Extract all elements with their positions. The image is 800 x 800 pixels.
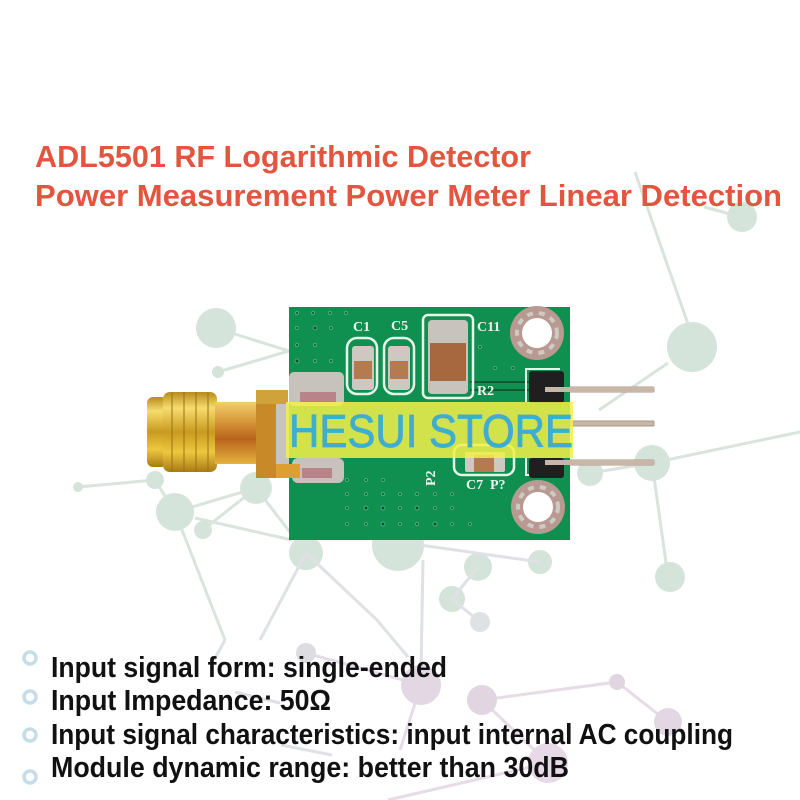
traces	[470, 382, 530, 390]
feature text: Input signal form: single-ended	[51, 652, 447, 684]
header pins	[540, 387, 654, 465]
product photo: RF detector module	[147, 306, 654, 540]
silkscreen and capacitors	[347, 315, 514, 475]
circuit board	[289, 307, 570, 540]
feature text	[51, 652, 733, 784]
vias	[295, 312, 514, 526]
silkscreen labels: C1	[353, 320, 370, 335]
molecular network: green nodes	[73, 172, 800, 640]
feature text: Input Impedance: 50Ω	[51, 685, 331, 717]
title: ADL5501 RF Logarithmic Detector	[35, 139, 531, 174]
silkscreen labels: R2	[477, 384, 494, 399]
molecular network: grey and purple nodes	[214, 545, 682, 800]
solder tabs	[289, 372, 344, 483]
title	[35, 139, 782, 213]
SMA connector	[147, 390, 300, 478]
title: Power Measurement Power Meter Linear Detection	[35, 178, 782, 213]
header block	[526, 369, 654, 478]
feature text: Input signal characteristics: input internal AC coupling	[51, 719, 733, 751]
silkscreen labels: C11	[477, 320, 500, 335]
silkscreen labels	[353, 319, 506, 493]
silkscreen labels: P2	[424, 470, 439, 486]
bullet icons	[24, 652, 36, 783]
silkscreen labels: P?	[490, 478, 506, 493]
feature list	[24, 652, 733, 784]
silkscreen labels: C5	[391, 319, 408, 334]
watermark banner: HESUI STORE	[289, 405, 573, 457]
silkscreen labels: C7	[466, 478, 483, 493]
feature text: Module dynamic range: better than 30dB	[51, 752, 569, 784]
mounting holes	[510, 306, 565, 534]
